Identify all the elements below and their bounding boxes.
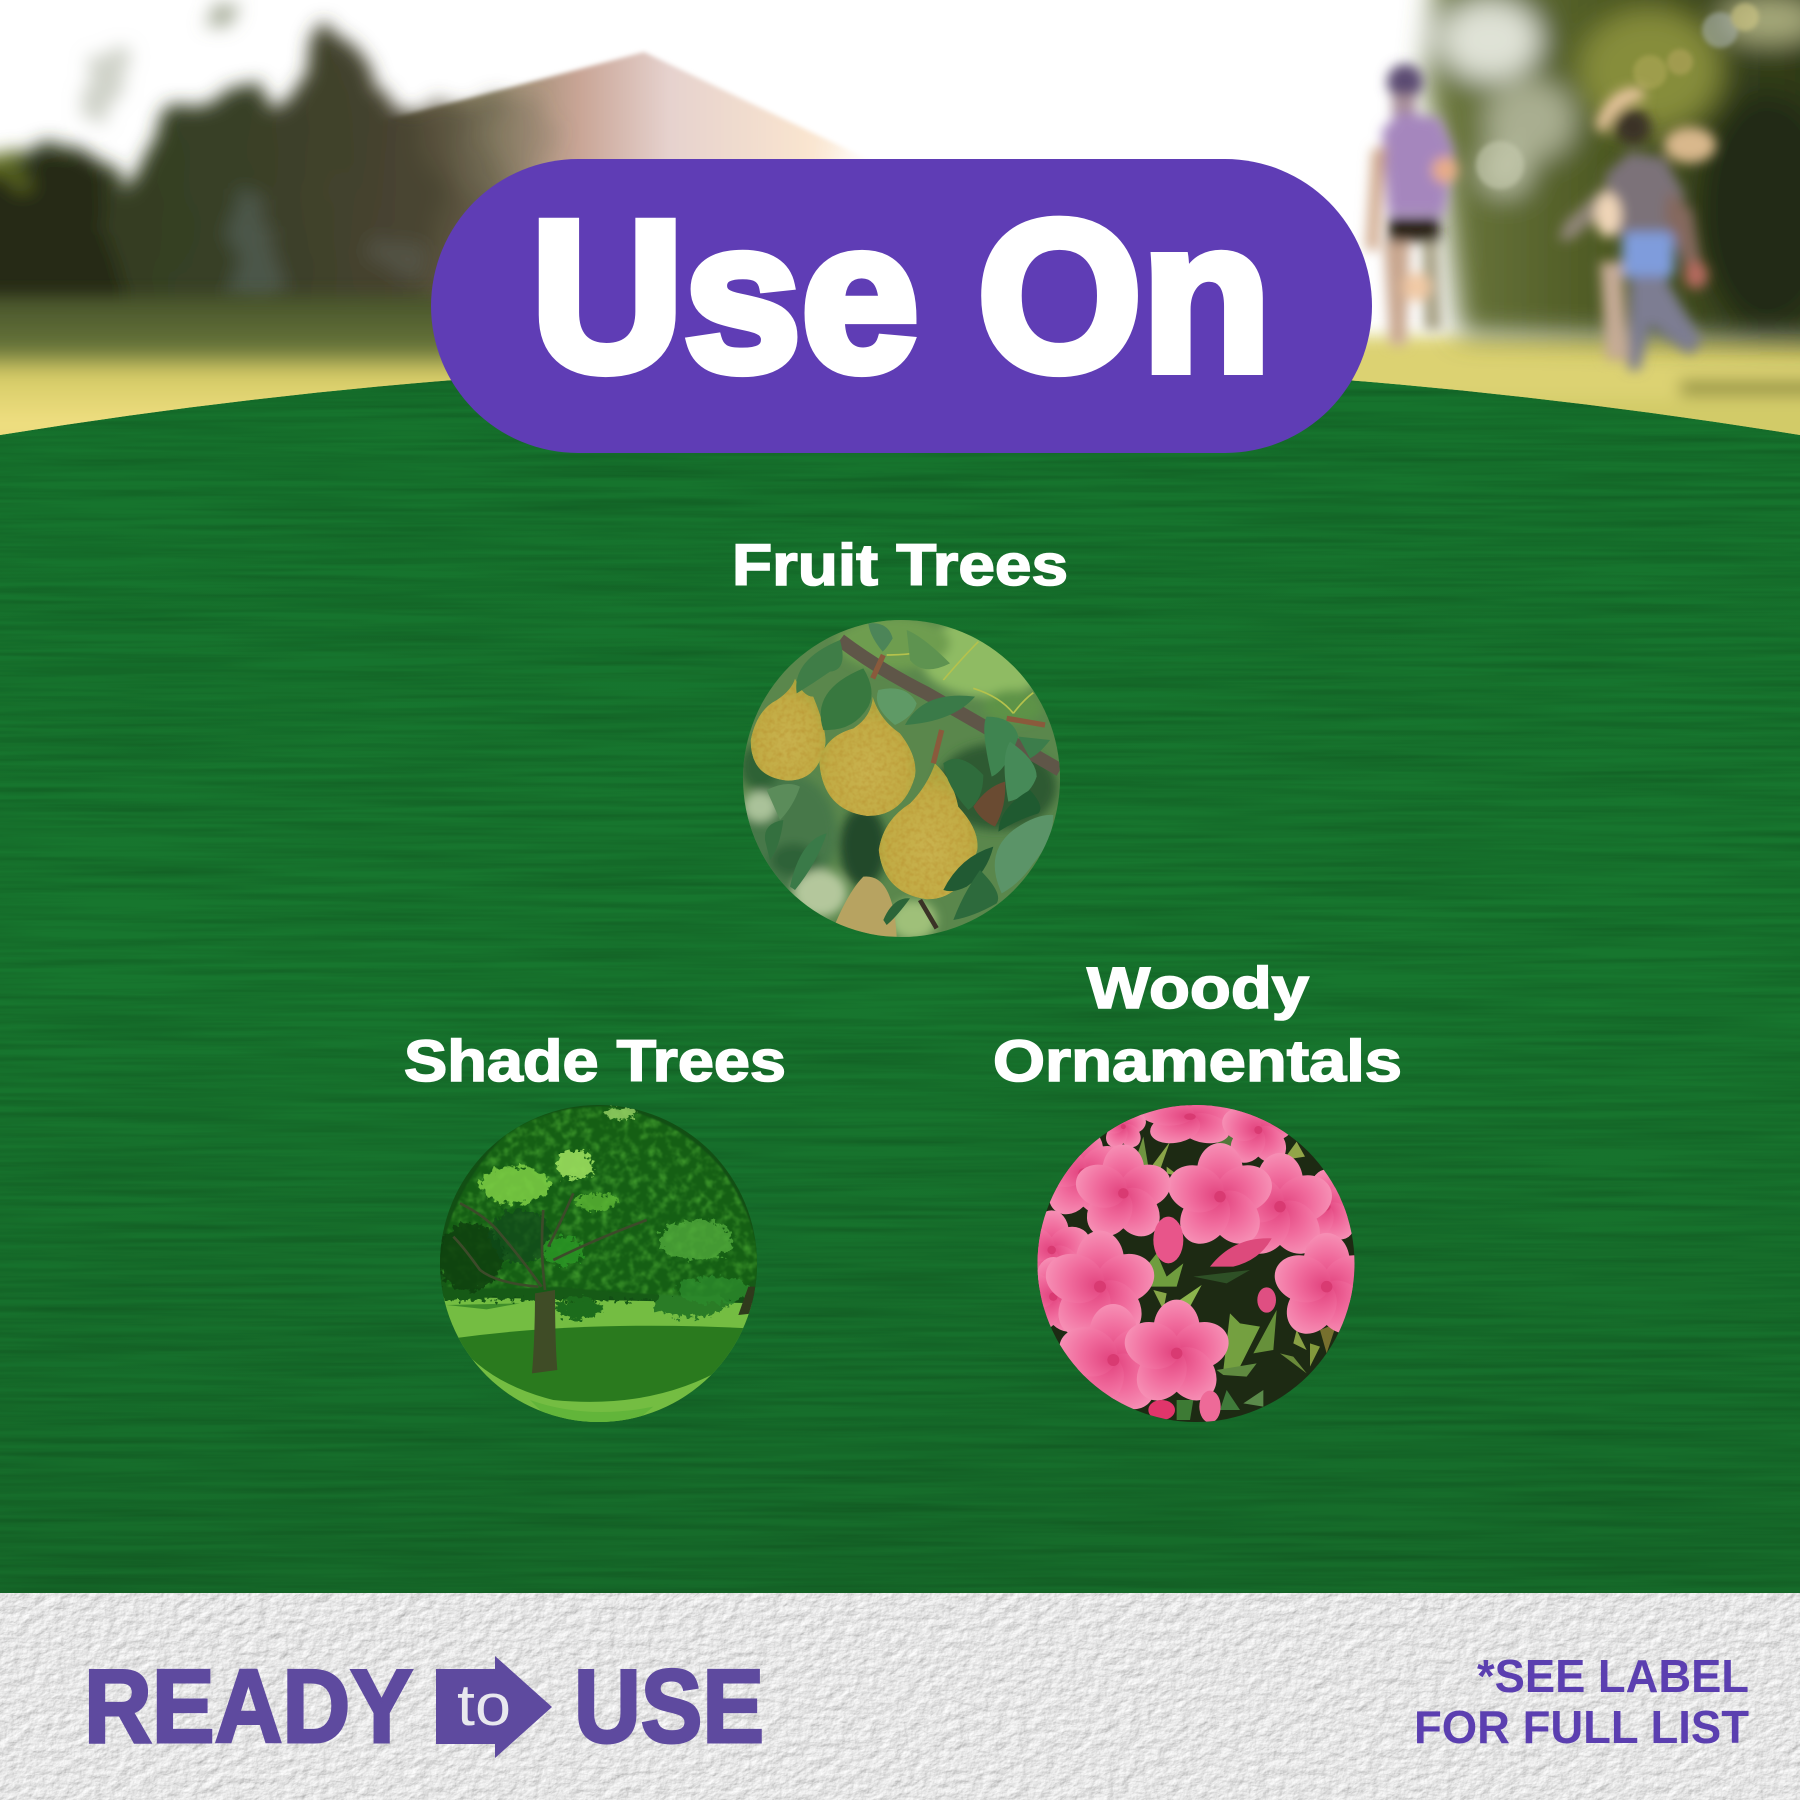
heading: Shade Trees: Shade Trees <box>404 1029 786 1094</box>
logo: READY to USE with arrow: READY <box>84 1649 413 1765</box>
icon: arrow with the word to: to <box>457 1673 511 1738</box>
bokeh highlights <box>1476 3 1759 189</box>
footnote: see label for full list: *SEE LABEL <box>1477 1650 1749 1702</box>
lawn <box>440 1297 760 1427</box>
photo: pink azalea flowers <box>1038 1105 1354 1422</box>
right tree canopy <box>1425 0 1800 345</box>
heading: Fruit Trees: Fruit Trees <box>732 533 1068 598</box>
icon: arrow with the word to <box>436 1656 552 1758</box>
title pill: Use On <box>431 159 1372 453</box>
running child: younger <box>1558 88 1716 370</box>
logo: READY to USE with arrow <box>84 1649 764 1765</box>
green wood-textured panel with curved top <box>0 362 1800 1593</box>
photo: pears on branch <box>733 613 1067 947</box>
footnote: see label for full list <box>1414 1650 1749 1753</box>
footer: textured white plaster strip <box>0 1593 1800 1800</box>
house <box>380 52 880 340</box>
background hedge <box>440 1278 760 1317</box>
heading: Woody Ornamentals: Ornamentals <box>993 1029 1402 1094</box>
left and right lawn <box>0 295 1800 486</box>
running child: older <box>1366 64 1458 345</box>
logo: READY to USE with arrow: USE <box>574 1649 764 1765</box>
canopy <box>440 1106 760 1297</box>
photo: shade tree on lawn <box>433 1100 767 1433</box>
heading: Woody Ornamentals: Woody <box>1087 956 1309 1021</box>
branches <box>453 1193 647 1290</box>
footnote: see label for full list: FOR FULL LIST <box>1414 1701 1749 1753</box>
heading: Woody Ornamentals <box>993 956 1402 1094</box>
left tree line <box>0 5 560 340</box>
background photo: blurred yard with house and running children <box>0 0 1800 486</box>
trunk <box>532 1290 557 1373</box>
title pill: Use On: Use On <box>531 177 1271 416</box>
sun glow <box>840 110 960 230</box>
